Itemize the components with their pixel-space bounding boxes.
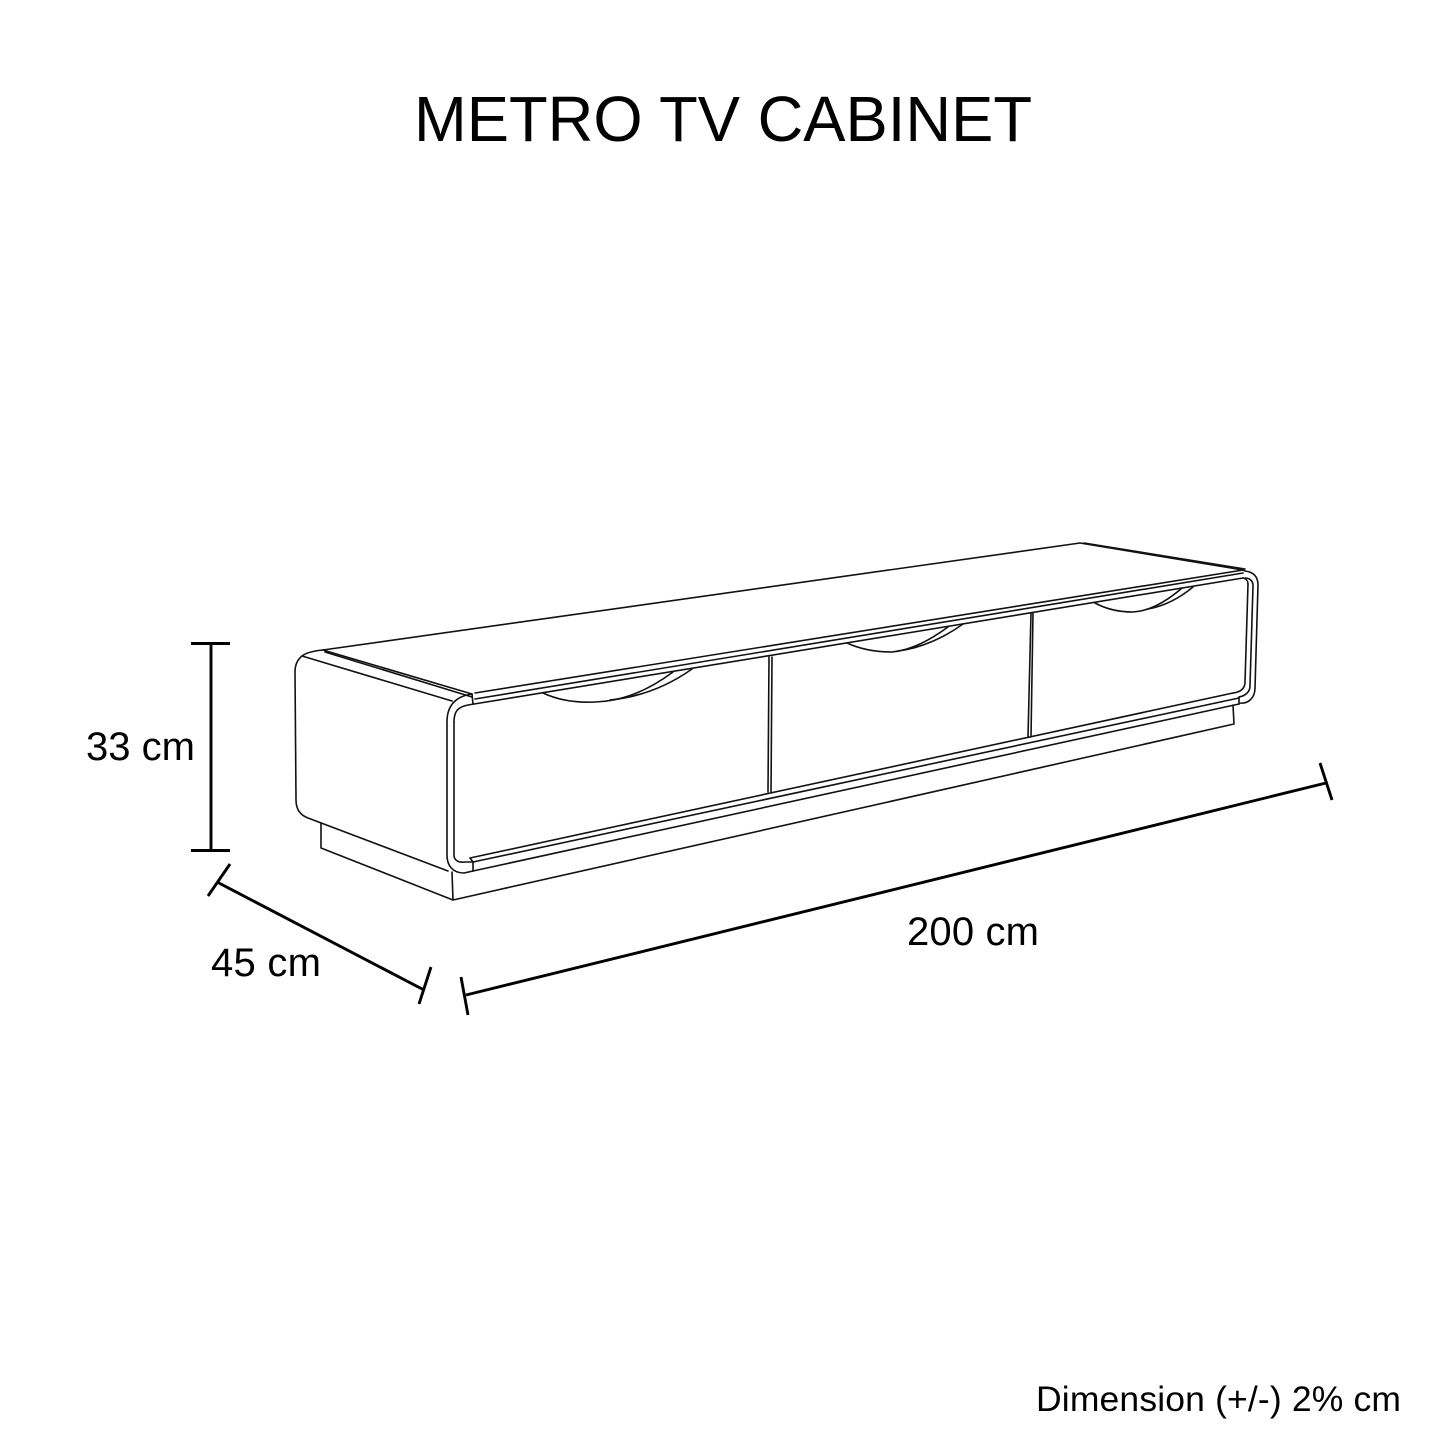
dimension: width 200 cm xyxy=(461,763,1332,1015)
dimension: depth 45 cm: 45 cm xyxy=(211,941,321,985)
tolerance note: Dimension (+/-) 2% cm xyxy=(1036,1379,1401,1419)
plinth base xyxy=(321,705,1234,900)
dimension: depth 45 cm xyxy=(208,864,431,1004)
dimension: width 200 cm: 200 cm xyxy=(907,910,1039,954)
dimension: height 33 cm: 33 cm xyxy=(86,725,195,769)
drawer dividers xyxy=(768,613,1033,792)
cabinet line drawing xyxy=(295,543,1258,900)
cabinet top surface xyxy=(323,543,1245,697)
drawer handle 1 xyxy=(543,669,692,702)
front frame xyxy=(447,570,1258,873)
drawer handle 2 xyxy=(847,624,963,652)
left side panel xyxy=(295,650,452,871)
dimension: height 33 cm xyxy=(86,644,230,850)
drawer handle 3 xyxy=(1095,587,1193,612)
bottom rails xyxy=(470,693,1239,871)
title: METRO TV CABINET xyxy=(414,83,1032,155)
